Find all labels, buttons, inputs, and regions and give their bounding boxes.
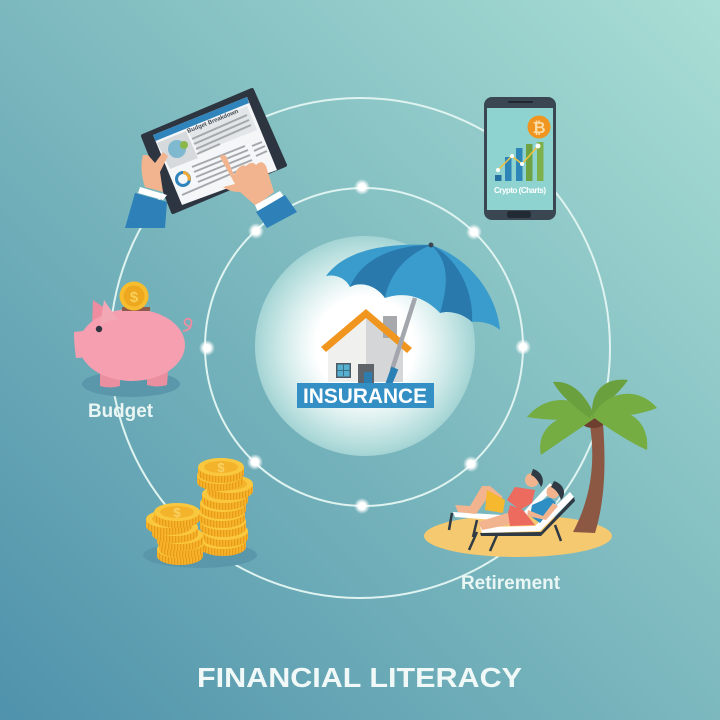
label: retirement: Retirement: [461, 573, 561, 594]
title: FINANCIAL LITERACY: [197, 662, 522, 693]
ring nodes: [199, 179, 531, 514]
central glow disc: [255, 236, 475, 456]
gold coin: $: [130, 289, 139, 306]
left stack: $: [173, 505, 181, 520]
icon: phone with crypto chart: [484, 97, 556, 220]
bars: [495, 142, 544, 181]
icon: house: [321, 309, 412, 383]
inner ring: [205, 188, 523, 506]
right stack: $: [217, 460, 225, 475]
insurance banner: [297, 383, 434, 408]
phone label: Crypto (Charts): [494, 186, 546, 195]
right hand: [220, 155, 274, 206]
woman: [478, 481, 564, 530]
bitcoin coin: ₿: [532, 119, 546, 137]
icon: tablet with hands: [125, 90, 297, 228]
man: [455, 469, 543, 514]
palm leaves: [527, 380, 657, 455]
icon: retirement island: [424, 380, 657, 557]
trend line: [496, 144, 540, 172]
label: budget: Budget: [88, 401, 154, 422]
insurance label: INSURANCE: [303, 385, 427, 408]
lounge chairs: [449, 483, 575, 551]
icon: umbrella: [326, 242, 500, 382]
left hand: [142, 152, 168, 192]
icon: piggy bank: [74, 282, 192, 397]
palm trunk: [573, 423, 604, 533]
outer ring: [110, 98, 610, 598]
icon: tablet with hands: Budget Breakdown: [187, 109, 240, 135]
icon: coin stacks: [143, 458, 257, 568]
